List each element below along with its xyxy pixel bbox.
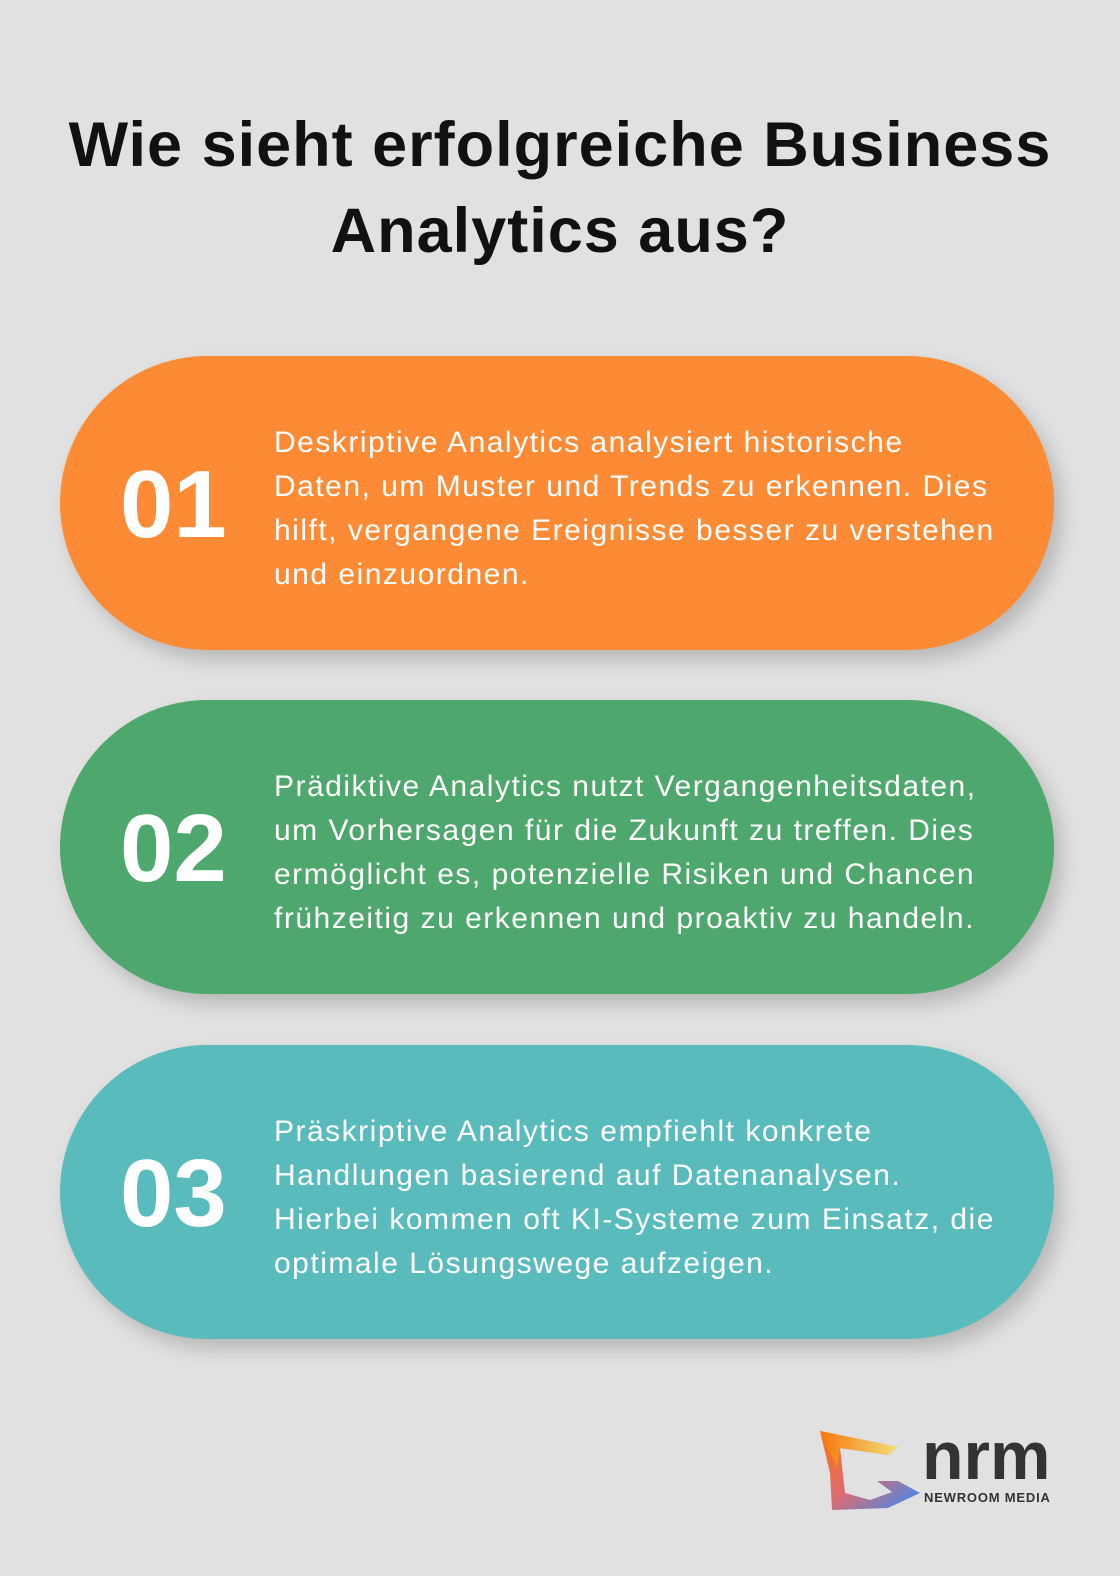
- text 02: [274, 770, 977, 935]
- brand subtitle: NEWROOM MEDIA: [924, 1490, 1051, 1505]
- logo: [820, 1418, 1051, 1510]
- title: Analytics aus?: [331, 196, 789, 266]
- icon: logo mark: [820, 1431, 920, 1510]
- text 02: um Vorhersagen für die Zukunft zu treffen. Dies: [274, 814, 974, 847]
- text 01: Daten, um Muster und Trends zu erkennen. Dies: [274, 470, 988, 503]
- text 02: ermöglicht es, potenzielle Risiken und Chancen: [274, 858, 975, 891]
- card 02: [60, 700, 1054, 994]
- text 03: [274, 1115, 995, 1280]
- title: [68, 110, 1051, 266]
- number 03: 03: [120, 1140, 227, 1247]
- text 03: Präskriptive Analytics empfiehlt konkrete: [274, 1115, 872, 1148]
- card 01: [60, 356, 1054, 650]
- text 01: und einzuordnen.: [274, 558, 530, 591]
- text 01: [274, 426, 995, 591]
- text 01: hilft, vergangene Ereignisse besser zu verstehen: [274, 514, 995, 547]
- text 03: Handlungen basierend auf Datenanalysen.: [274, 1159, 901, 1192]
- text 02: Prädiktive Analytics nutzt Vergangenheitsdaten,: [274, 770, 977, 803]
- text 01: Deskriptive Analytics analysiert historische: [274, 426, 904, 459]
- text 03: optimale Lösungswege aufzeigen.: [274, 1247, 774, 1280]
- brand name: nrm: [922, 1418, 1050, 1494]
- text 02: frühzeitig zu erkennen und proaktiv zu handeln.: [274, 902, 975, 935]
- card 03: [60, 1045, 1054, 1339]
- number 02: 02: [120, 795, 227, 902]
- text 03: Hierbei kommen oft KI-Systeme zum Einsatz, die: [274, 1203, 995, 1236]
- title: Wie sieht erfolgreiche Business: [69, 110, 1051, 180]
- number 01: 01: [120, 451, 227, 558]
